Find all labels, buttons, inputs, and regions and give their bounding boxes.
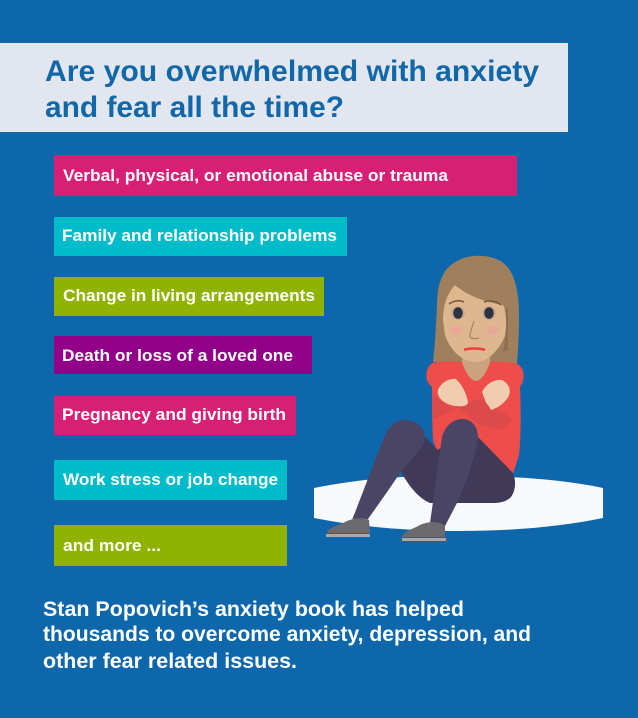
title banner: [0, 43, 568, 132]
hip and thigh: [400, 433, 515, 503]
bar: work stress: Work stress or job change: [63, 470, 278, 489]
bar: death or loss: Death or loss of a loved one: [62, 346, 293, 365]
bar: living arrangements: Change in living arrangements: [63, 286, 315, 305]
title banner: Are you overwhelmed with anxiety: [45, 55, 539, 88]
illustration: white disc: [314, 476, 603, 531]
bar: pregnancy: [54, 396, 296, 435]
far leg: [352, 420, 425, 520]
near leg: [430, 419, 478, 526]
illustration: anxious woman sitting: [326, 256, 524, 541]
nose: [470, 321, 479, 339]
bar: and more: [54, 525, 287, 566]
bar: family problems: [54, 217, 347, 256]
face: [443, 285, 506, 362]
cheeks: [450, 326, 500, 334]
eyes: [451, 306, 496, 320]
crossed arm shade: [432, 395, 514, 430]
hair: [433, 256, 519, 364]
neck: [462, 352, 490, 381]
bar: work stress: [54, 460, 287, 500]
closing statement: thousands to overcome anxiety, depression, and: [43, 623, 531, 646]
closing statement: [43, 598, 531, 673]
hands: [438, 379, 510, 410]
title banner: and fear all the time?: [45, 91, 344, 124]
bar: and more: and more ...: [63, 536, 161, 555]
bar: pregnancy: Pregnancy and giving birth: [62, 405, 286, 424]
shoes: [326, 518, 446, 541]
bar: family problems: Family and relationship problems: [62, 226, 337, 245]
mouth: [464, 348, 485, 350]
bar: abuse or trauma: [54, 155, 517, 196]
bar: death or loss: [54, 336, 312, 374]
bar: abuse or trauma: Verbal, physical, or emotional abuse or trauma: [63, 166, 449, 185]
hair strand shadow: [503, 307, 508, 352]
eyebrows: [449, 301, 501, 305]
closing statement: Stan Popovich’s anxiety book has helped: [43, 598, 464, 621]
sweater: [426, 361, 524, 474]
closing statement: other fear related issues.: [43, 650, 297, 673]
bar: living arrangements: [54, 277, 324, 316]
